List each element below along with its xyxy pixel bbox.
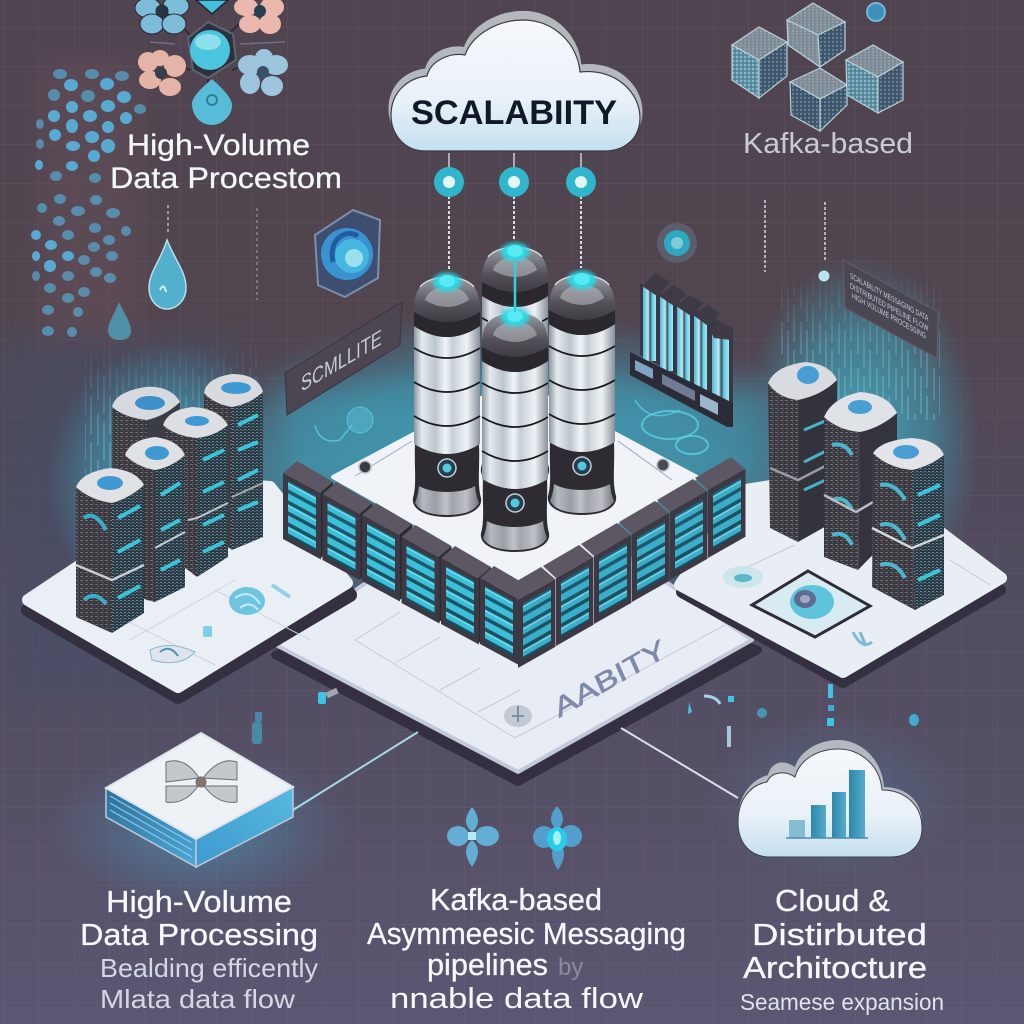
plaque: right text panel [843,260,938,358]
halftone dot field [31,69,146,337]
panel: center upper platform [333,380,697,580]
icon: small gauge mark [504,705,532,727]
icon: glowing four-petal flower [533,806,582,870]
caption: Cloud and Distributed Architecture: Architocture [743,950,927,985]
caption: Cloud and Distributed Architecture: Seamese expansion [740,989,944,1015]
flower network cluster [135,0,288,125]
icon: dot at connector end [818,270,830,282]
connector: platform to cloud [621,728,738,798]
plaque: Scalite sign: SCMLLITE [301,324,382,397]
caption: Cloud and Distributed Architecture: Cloud & [775,883,890,918]
icon: platform swirl [150,585,290,663]
caption: High-Volume Data Processing: High-Volume [106,884,292,919]
server wall: left row [283,461,530,665]
icon: cube right [846,45,903,113]
plaque: right text panel: SCALABILITY MESSAGING DATA [850,271,929,323]
icon: platform glyphs [723,566,872,646]
cylinder: left [413,273,481,517]
icon: chart cloud [738,740,922,857]
icon: cube left [732,27,787,98]
heading: High-Volume Data Processing (top): High-Volume [127,129,310,162]
cylinder: right [548,271,616,515]
connector thin line near drop [256,208,258,300]
data rain streaks: right [780,270,940,420]
tower: rear [768,362,837,542]
floor label: AABITY [549,634,670,723]
left server towers [76,374,263,633]
icon: cube top [787,3,845,67]
icon: small blue oval [867,3,885,21]
caption: High-Volume Data Processing [80,884,318,1014]
icon: lower-left peach flower [138,50,186,96]
tower: front [76,468,144,633]
caption: Cloud and Distributed Architecture [740,883,944,1015]
caption: High-Volume Data Processing: Bealding efficently [100,953,318,983]
plaque: right text panel: HIGH VOLUME PROCESSING [852,291,926,341]
tower: middle right [163,407,228,577]
chart bars [786,770,868,838]
tower: middle [824,392,897,570]
caption: Kafka-based messaging: pipelines [427,947,548,982]
caption: Kafka-based messaging: Kafka-based [430,882,602,917]
title cloud [389,11,642,151]
caption: Kafka-based messaging [367,882,686,1015]
glowing connector nodes [434,153,596,312]
connectors above right panel [765,200,825,272]
icon: teal ring [657,223,697,263]
storage cylinders cluster [413,243,616,552]
caption: Cloud and Distributed Architecture: Distirbuted [752,917,927,952]
tower: rear right [204,374,263,550]
panel: left platform [28,482,350,697]
server wall: right row [505,457,746,668]
tower: front [872,438,944,610]
icon: hexagon core [188,22,236,78]
teal background glows [45,255,980,910]
caption: Kafka-based messaging: nnable data flow [390,983,644,1015]
icon: right bolt [657,459,669,471]
caption: High-Volume Data Processing: Mlata data flow [100,984,295,1014]
icon: cube front [790,68,847,131]
icon: top-right peach flower [234,0,284,34]
icon: book cover emblem [166,761,237,802]
bar panel with signage [630,273,733,427]
plaque: right text panel: DISTRIBUTED PIPELINE FLOW [850,281,929,333]
plaque: Scalite sign [285,302,402,415]
caption: Kafka-based messaging: Asymmeesic Messaging [367,916,686,951]
icon: large water drop [149,205,186,309]
icon: top-left blue flower [135,0,189,34]
icon: book stack [106,733,293,867]
icon: top diamond [196,0,228,14]
icon: bottom petal with swirl [192,79,232,125]
icon: shield [315,210,380,297]
icon: left bolt [359,461,371,473]
caption: Kafka-based messaging: by [558,954,583,981]
icon: blue four-petal flower [447,807,499,867]
panel: center lower platform [275,480,758,782]
bar panel base strip [630,352,733,427]
heading: Kafka-based (top): Kafka-based [743,128,913,160]
caption: High-Volume Data Processing: Data Processing [80,917,318,952]
tower: middle front [125,437,185,602]
scattered cyan data bits [252,684,919,747]
panel: right platform [680,472,1001,682]
data rain streaks: left [85,352,256,476]
title text: SCALABIITY [411,94,617,132]
icon: small water drop [108,302,131,340]
heading: High-Volume Data Processing (top) [110,129,342,195]
cylinder: back [481,243,549,487]
Kafka cube cluster [732,3,903,131]
tower: back [112,387,180,500]
holographic swirls near platform [315,400,708,454]
icon: floor screen [752,571,870,637]
right server towers [768,362,944,610]
bars [640,273,733,405]
connector: book to platform [293,732,418,810]
heading: High-Volume Data Processing (top): Data Procestom [110,162,342,195]
cylinder: front [481,308,549,552]
icon: lower-right blue flower [238,49,288,96]
